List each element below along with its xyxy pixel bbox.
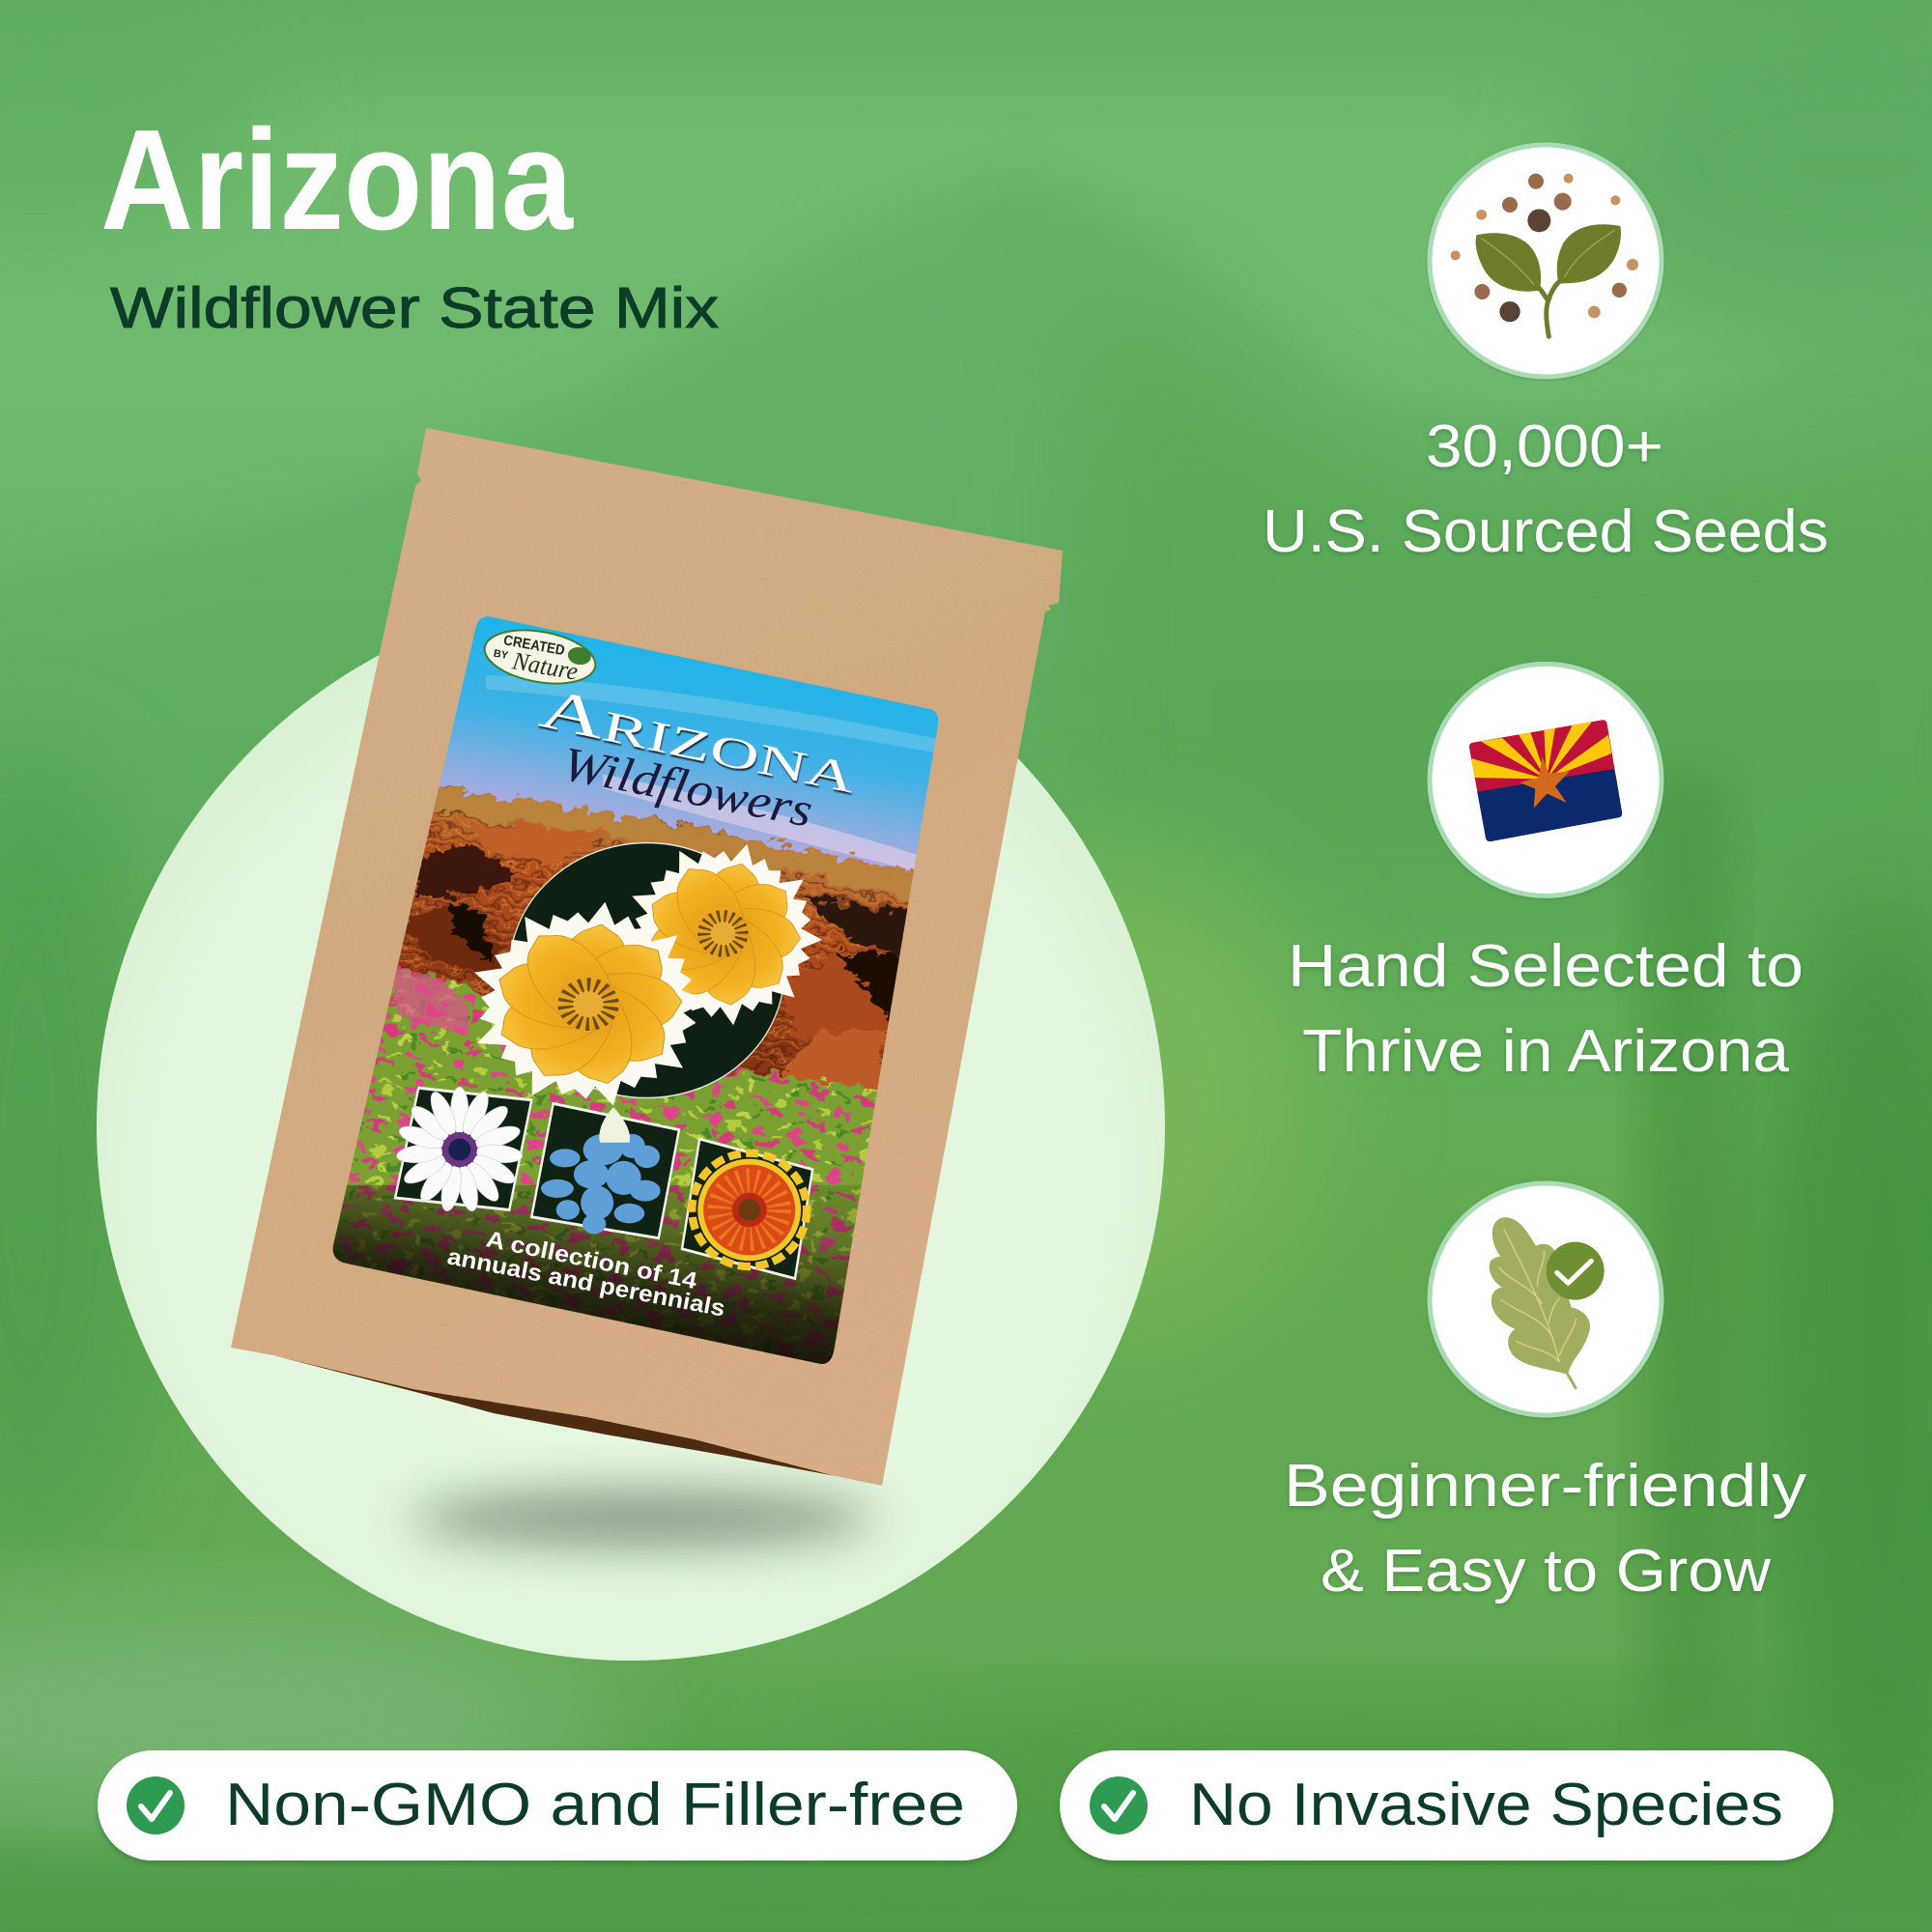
wildflower meadow	[332, 965, 877, 1364]
text: 30,000+ U.S. Sourced Seeds	[1263, 413, 1829, 565]
kraft pouch	[231, 428, 1063, 1486]
floating shadow under bag	[411, 1490, 874, 1548]
label caption: annuals and perennials	[445, 1243, 727, 1322]
label brand logo	[480, 622, 600, 692]
label script: Wildflowers: Wildflowers	[558, 736, 817, 838]
text: Beginner-friendly & Easy to Grow: Beginner-friendly	[1284, 1453, 1806, 1520]
flower tile: white daisy	[395, 1087, 531, 1212]
sky	[412, 616, 939, 902]
pale green disc behind product	[97, 592, 1165, 1661]
text: Beginner-friendly & Easy to Grow: & Easy to Grow	[1321, 1538, 1771, 1605]
label brand logo: Nature	[509, 646, 580, 686]
text: Hand Selected to Thrive in Arizona: Hand Selected to	[1288, 933, 1804, 1000]
label brand logo: CREATED	[502, 632, 566, 659]
feature: beginner friendly	[1284, 1183, 1806, 1605]
badge: Non-GMO and Filler-free	[98, 1750, 1017, 1861]
icon: check	[127, 1776, 185, 1834]
label title: Arizona: A RIZONA	[534, 676, 863, 805]
feature flower right	[632, 844, 822, 1026]
canyon	[386, 784, 914, 1107]
icon: seeds and sprout	[1430, 145, 1662, 377]
badge: No Invasive Species	[1060, 1750, 1833, 1861]
icon: check	[1090, 1776, 1148, 1834]
label brand logo: BY	[493, 648, 510, 662]
text: Hand Selected to Thrive in Arizona	[1288, 933, 1804, 1085]
text: Hand Selected to Thrive in Arizona: Thrive in Arizona	[1302, 1018, 1790, 1085]
feature: Arizona flag	[1288, 664, 1804, 1085]
product: seed packet	[231, 428, 1063, 1486]
badge text: No Invasive Species	[1189, 1772, 1783, 1838]
bag bottom fold	[273, 1355, 836, 1476]
icon: Arizona state flag	[1430, 664, 1662, 895]
subtitle: Wildflower State Mix	[110, 276, 719, 340]
feature flower left	[474, 902, 696, 1105]
title: Arizona	[100, 100, 575, 260]
label caption: A collection of 14	[484, 1226, 699, 1294]
text: Beginner-friendly & Easy to Grow	[1284, 1453, 1806, 1605]
front label artwork	[332, 616, 939, 1364]
flower tile: blanket flower	[682, 1139, 812, 1279]
dark circular backdrop	[509, 843, 784, 1098]
flower tile: bluebonnet	[531, 1103, 679, 1238]
feature: seeds	[1263, 145, 1829, 565]
icon: leaf with check badge	[1430, 1183, 1662, 1415]
text: 30,000+ U.S. Sourced Seeds: 30,000+	[1426, 413, 1663, 480]
badge text: Non-GMO and Filler-free	[225, 1772, 965, 1838]
text: 30,000+ U.S. Sourced Seeds: U.S. Sourced Seeds	[1263, 498, 1829, 565]
